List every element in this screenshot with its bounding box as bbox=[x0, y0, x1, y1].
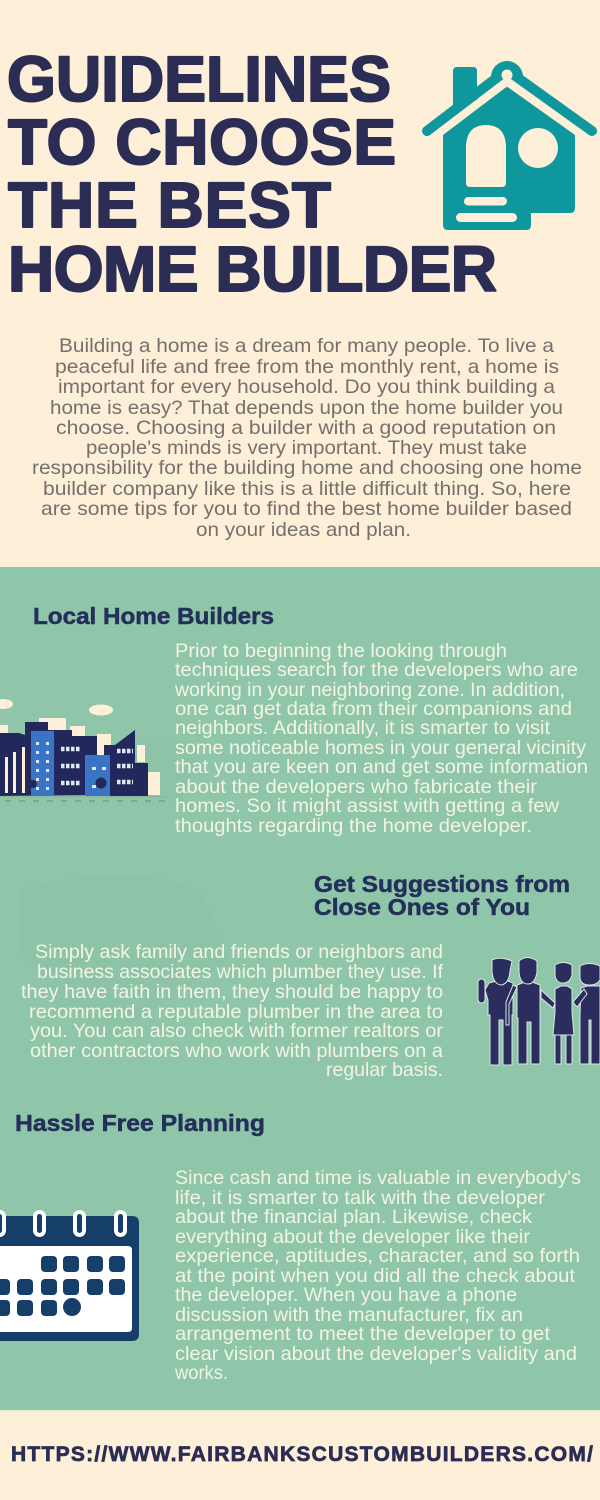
intro paragraph bbox=[32, 335, 582, 541]
intro paragraph: people's minds is very important. They must take bbox=[86, 437, 527, 459]
intro paragraph: Building a home is a dream for many people. To live a bbox=[59, 335, 554, 357]
footer url: HTTPS://WWW.FAIRBANKSCUSTOMBUILDERS.COM/ bbox=[11, 1443, 593, 1466]
text: hassle free planning: discussion with the manufacturer, fix an bbox=[175, 1304, 523, 1326]
text: get suggestions: business associates which plumber they use. If bbox=[37, 961, 444, 983]
text: local home builders: techniques search for the developers who are bbox=[175, 659, 578, 681]
text: local home builders: Prior to beginning the looking through bbox=[175, 640, 507, 662]
text: hassle free planning: works. bbox=[174, 1362, 228, 1384]
heading: get suggestions bbox=[314, 871, 570, 920]
text: hassle free planning: at the point when you did all the check about bbox=[175, 1265, 576, 1287]
intro paragraph: responsibility for the building home and choosing one home bbox=[32, 457, 582, 479]
text: local home builders: homes. So it might assist with getting a few bbox=[175, 795, 560, 817]
text: hassle free planning bbox=[174, 1167, 581, 1384]
text: local home builders: working in your neighboring zone. In addition, bbox=[174, 679, 565, 701]
text: local home builders: thoughts regarding the home developer. bbox=[175, 815, 532, 837]
text: get suggestions: Simply ask family and friends or neighbors and bbox=[35, 941, 443, 963]
text: get suggestions: you. You can also check with former realtors or bbox=[30, 1020, 444, 1042]
text: local home builders: about the developers who fabricate their bbox=[175, 776, 538, 798]
intro paragraph: home is easy? That depends upon the home builder you bbox=[50, 397, 563, 419]
text: local home builders: neighbors. Additionally, it is smarter to visit bbox=[175, 717, 551, 739]
intro paragraph: choose. Choosing a builder with a good reputation on bbox=[56, 417, 556, 439]
text: hassle free planning: everything about the developer like their bbox=[175, 1226, 531, 1248]
intro paragraph: peaceful life and free from the monthly rent, a home is bbox=[55, 356, 559, 378]
text: get suggestions: recommend a reputable plumber in the area to bbox=[29, 1001, 443, 1023]
text: hassle free planning: the developer. When you have a phone bbox=[175, 1284, 517, 1306]
intro paragraph: on your ideas and plan. bbox=[196, 519, 411, 541]
heading: hassle free planning: Hassle Free Planning bbox=[15, 1110, 265, 1136]
title: TO CHOOSE bbox=[8, 106, 396, 178]
heading: get suggestions: Close Ones of You bbox=[314, 894, 530, 920]
text: local home builders: that you are keen on and get some information bbox=[175, 756, 588, 778]
text: local home builders bbox=[174, 640, 588, 837]
text: local home builders: one can get data from their companions and bbox=[175, 698, 572, 720]
heading: local home builders: Local Home Builders bbox=[33, 603, 274, 629]
icon: city skyline bbox=[0, 699, 170, 801]
icon: calendar bbox=[0, 1212, 139, 1341]
text: hassle free planning: arrangement to meet the developer to get bbox=[175, 1323, 551, 1345]
text: hassle free planning: Since cash and time is valuable in everybody's bbox=[175, 1167, 581, 1189]
title: THE BEST bbox=[8, 169, 331, 241]
icon: teal house bbox=[427, 61, 592, 230]
title: GUIDELINES bbox=[7, 43, 391, 115]
text: get suggestions: regular basis. bbox=[326, 1059, 443, 1081]
text: hassle free planning: about the financial plan. Likewise, check bbox=[175, 1206, 532, 1228]
panel: green tips section bbox=[0, 567, 600, 1412]
title bbox=[7, 43, 497, 305]
heading: get suggestions: Get Suggestions from bbox=[314, 871, 570, 897]
intro paragraph: builder company like this is a little difficult thing. So, here bbox=[43, 478, 571, 500]
text: get suggestions bbox=[21, 941, 444, 1081]
text: get suggestions: they have faith in them, they should be happy to bbox=[21, 981, 443, 1003]
text: get suggestions: other contractors who work with plumbers on a bbox=[30, 1040, 443, 1062]
intro paragraph: important for every household. Do you think building a bbox=[58, 376, 555, 398]
text: hassle free planning: life, it is smarter to talk with the developer bbox=[175, 1187, 546, 1209]
title: HOME BUILDER bbox=[8, 233, 497, 305]
text: hassle free planning: experience, aptitudes, character, and so forth bbox=[175, 1245, 580, 1267]
icon: group of people bbox=[478, 958, 600, 1065]
text: local home builders: some noticeable homes in your general vicinity bbox=[175, 737, 586, 759]
text: hassle free planning: clear vision about the developer's validity and bbox=[175, 1343, 577, 1365]
intro paragraph: are some tips for you to find the best home builder based bbox=[41, 498, 572, 520]
